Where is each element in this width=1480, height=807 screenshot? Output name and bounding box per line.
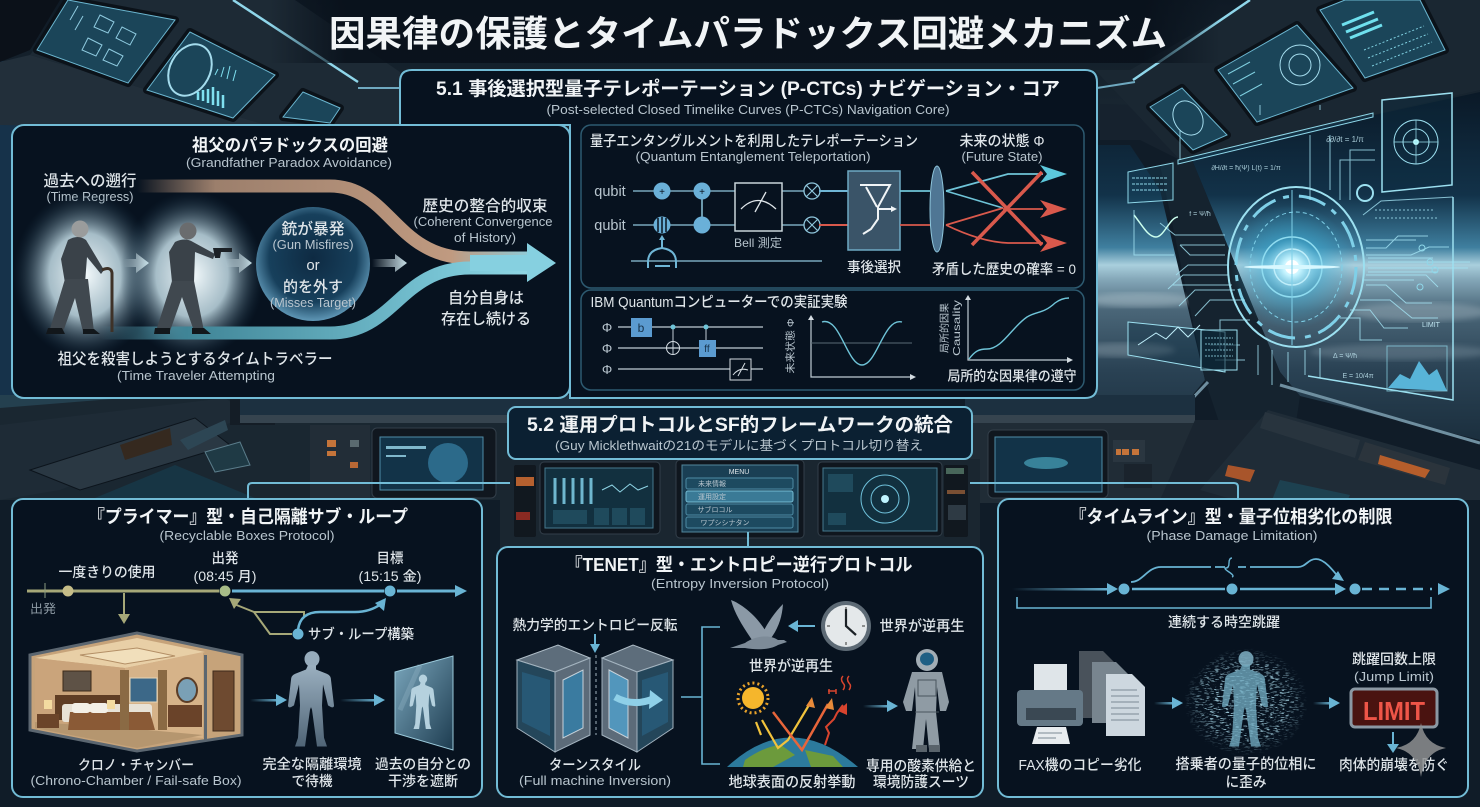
sub-loop construction: サブ・ループ構築 [308,626,414,642]
label: coherent convergence: (Coherent Convergence [414,214,552,229]
sub-loop construction [229,598,414,642]
label: self continues to exist: 自分自身は [448,289,524,307]
arrow [1387,732,1399,753]
quantum circuit: + [699,187,705,198]
label: phase distortion [1176,756,1316,791]
panel: Primer self-isolation sub-loop [12,499,482,797]
holographic navigation display: f = Ψ/ħ [1189,211,1211,218]
timeline: 一度きりの使用 [58,564,156,580]
label: jump limit: (Jump Limit) [1354,669,1434,684]
label: phase distortion: 搭乗者の量子的位相に [1176,756,1316,773]
icon: LIMIT sign [1351,689,1437,727]
timeline of jumps [1012,558,1450,630]
lens [930,166,944,252]
panel: 5.2 console screens [516,465,966,532]
heading: Primer: (Recyclable Boxes Protocol) [160,528,334,543]
heading: Timeline: 『タイムライン』型・量子位相劣化の制限 [1070,507,1392,527]
label: isolated waiting: で待機 [292,773,332,789]
label: time regress: (Time Regress) [46,189,134,204]
post-selection filter box: 事後選択 [847,259,901,275]
heading: future state [960,132,1044,164]
sphere: gun misfires or misses target: or [306,257,320,274]
panel: 5.2 console screens: 運用設定 [698,492,726,501]
quantum circuit: Bell 測定 [734,236,782,250]
panel: 5.1 P-CTCs navigation core [400,70,1097,398]
heading: Primer: 『プライマー』型・自己隔離サブ・ループ [88,506,408,527]
heading: TENET: (Entropy Inversion Protocol) [651,576,829,591]
sphere: gun misfires or misses target: (Gun Misfires) [272,237,354,252]
icon: clock [821,601,871,651]
timeline: 出発 [30,602,57,616]
arrow [124,253,149,273]
circuit diagram: Φ [602,320,612,335]
label: self continues to exist: 存在し続ける [441,310,531,328]
timeline: 出発 [212,550,238,566]
label: block interference [375,756,471,789]
flow band: traveler timeline [100,268,530,333]
heading panel: 5.2 protocol integration [508,407,972,459]
heading panel: 5.2 protocol integration: 5.2 運用プロトコルとSF的フレームワークの統合 [527,414,953,436]
holographic navigation display: ∂H/∂t = ħ(Ψ) L(t) = 1/π [1211,165,1281,172]
rays and crossed out histories: 矛盾した歴史の確率 = 0 [932,261,1076,277]
label: coherent convergence: 歴史の整合的収束 [422,197,548,215]
icon: LIMIT sign: LIMIT [1363,696,1425,726]
timeline: (08:45 月) [194,569,256,584]
label: chrono-chamber: (Chrono-Chamber / Fail-safe Box) [30,773,242,788]
label: prevent physical collapse: 肉体的崩壊を防ぐ [1339,756,1449,774]
flow band: past timeline [137,186,530,258]
label: fax copy degradation: FAX機のコピー劣化 [1018,757,1142,774]
quantum circuit [594,182,848,268]
heading: TENET: 『TENET』型・エントロピー逆行プロトコル [566,555,912,575]
subheading 5.1: (Post-selected Closed Timelike Curves (P-CTCs) Navigation Core) [546,102,950,117]
glow behind figures [13,191,264,359]
heading: grandfather paradox: (Grandfather Paradox Avoidance) [186,155,392,170]
arrow [226,253,252,273]
label: time traveler attempting: 祖父を殺害しようとするタイムトラベラー [58,350,332,368]
panel: quantum entanglement teleportation [581,125,1084,288]
icon: phase distorted person [1184,648,1308,756]
icon: time traveler with gun [154,222,232,334]
sphere: gun misfires or misses target: 的を外す [283,278,343,296]
label: dedicated oxygen suit: 環境防護スーツ [873,774,969,791]
label: block interference: 干渉を遮断 [388,773,458,789]
timeline: (15:15 金) [358,569,422,584]
circuit diagram [602,318,763,380]
icon: sparkle watermark [1396,723,1446,777]
icon: glass pane with past self [395,656,453,750]
label: dedicated oxygen suit [866,758,976,791]
heading: grandfather paradox [186,136,392,170]
heading: teleportation [590,133,918,164]
circuit diagram: ff [704,344,710,355]
icon: elderly grandfather figure [46,220,112,334]
holographic navigation display: ∂∂/∂t = 1/π [1326,135,1364,144]
icon: turnstile machine [517,645,673,752]
label: self continues to exist [441,289,531,328]
label: coherent convergence: of History) [454,230,516,245]
timeline: 目標 [376,550,404,566]
arrow [1154,697,1183,709]
label: chrono-chamber [30,757,242,788]
arrow [372,254,407,272]
icon: fax machine and degraded copies [1017,651,1145,744]
panel: IBM Quantum demonstration [581,290,1084,390]
quantum circuit: qubit [594,184,626,200]
label: world plays in reverse: 世界が逆再生 [749,657,833,675]
icon: earth surface reflection [727,676,858,767]
post-selection filter box [847,171,901,275]
heading: Primer [88,506,408,543]
holographic navigation display [1128,93,1470,400]
chart: future state oscillation [784,315,916,380]
label: turnstile: ターンスタイル [549,757,641,774]
label: isolated waiting: 完全な隔離環境 [262,756,362,772]
heading 5.1: 5.1 事後選択型量子テレポーテーション (P-CTCs) ナビゲーション・コア [436,77,1060,100]
icon: chrono-chamber hotel room [30,633,242,751]
icon: isolated person [288,651,334,746]
holographic navigation display: E = 10/4π [1342,373,1374,380]
icon: bird flying backward [730,600,787,649]
connector lines between 5.2 and protocol panels [248,483,1238,547]
chart: causality curve: 局所的因果 [938,303,951,353]
label: jump limit: 跳躍回数上限 [1352,651,1436,667]
label: jump limit [1352,651,1436,684]
label: time regress: 過去への遡行 [44,172,136,190]
rays and crossed out histories [900,165,1076,277]
bracket connector [681,627,720,764]
quantum circuit: + [659,187,665,198]
title backdrop [270,0,1220,63]
chart: causality curve [938,295,1076,384]
panel: grandfather paradox avoidance [12,125,570,398]
icon: astronaut suit [903,649,949,752]
label: world plays in reverse: 世界が逆再生 [880,617,964,635]
arrow [863,700,898,712]
heading: teleportation: 量子エンタングルメントを利用したテレポーテーション [590,133,918,150]
label: coherent convergence [414,197,552,245]
panel: 5.2 console screens: 未来情報 [698,479,726,488]
panel: TENET entropy inversion [497,547,983,797]
heading: future state: (Future State) [962,149,1042,164]
label: turnstile [519,757,671,788]
chart: causality curve: 局所的な因果律の遵守 [948,368,1076,384]
heading: future state: 未来の状態 Φ [960,132,1044,150]
title: 因果律の保護とタイムパラドックス回避メカニズム [329,13,1167,54]
sphere: gun misfires or misses target: 銃が暴発 [282,219,345,238]
panel: 5.2 console screens: MENU [729,469,749,476]
label: earth reflection: 地球表面の反射挙動 [728,773,856,791]
timeline [27,550,467,624]
heading panel: 5.2 protocol integration: (Guy Micklethwaitの21のモデルに基づくプロトコル切り替え [555,438,923,453]
holographic navigation display: LIMIT [1422,322,1441,329]
holographic navigation display: Δ = Ψ/ħ [1333,353,1357,360]
panel: 5.2 console screens: ワプシシナタン [700,518,750,527]
chart: causality curve: Causality [952,300,963,356]
circuit diagram: Φ [602,341,612,356]
label: entropy reversal: 熱力学的エントロピー反転 [512,617,678,633]
quantum circuit: qubit [594,218,626,234]
heading: teleportation: (Quantum Entanglement Teleportation) [636,149,870,164]
heading: grandfather paradox: 祖父のパラドックスの回避 [192,136,388,155]
panel: 5.2 console screens: サブロコル [698,505,732,514]
label: dedicated oxygen suit: 専用の酸素供給と [866,758,976,775]
convergence arrow [470,243,556,282]
label: block interference: 過去の自分との [375,756,471,772]
circuit diagram: b [638,321,645,335]
panel: Timeline quantum phase damage limit [998,499,1468,797]
label: phase distortion: に歪み [1226,774,1266,791]
label: time regress [44,172,136,204]
label: chrono-chamber: クロノ・チャンバー [78,757,194,773]
chart: future state oscillation: 未来状態 Φ [784,318,797,374]
arrow [788,620,815,632]
heading: Timeline [1070,507,1392,543]
light strips and ceiling screens [37,0,1445,150]
arrow [590,634,600,653]
label: isolated waiting [262,756,362,789]
timeline of jumps: 連続する時空跳躍 [1168,614,1280,630]
label: time traveler attempting [58,350,332,383]
heading: TENET [566,555,912,591]
heading: Timeline: (Phase Damage Limitation) [1146,528,1318,543]
sphere: gun misfires or misses target: (Misses Target) [270,295,356,310]
sphere: gun misfires or misses target [256,207,370,321]
circuit diagram: Φ [602,362,612,377]
label: turnstile: (Full machine Inversion) [519,773,671,788]
arrow [1313,697,1340,709]
heading: IBM Quantum: IBM Quantumコンピューターでの実証実験 [590,294,848,311]
arrow [250,694,287,706]
label: time traveler attempting: (Time Traveler Attempting [117,368,275,383]
arrow [340,694,385,706]
